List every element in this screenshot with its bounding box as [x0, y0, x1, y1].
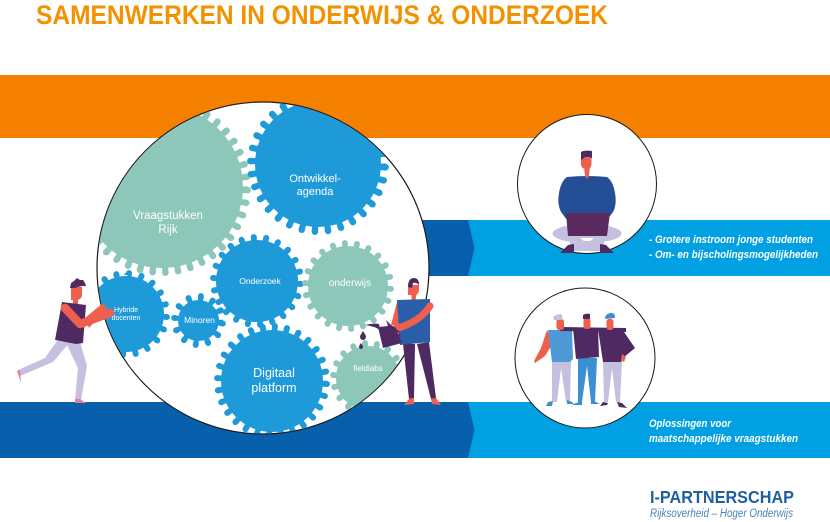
- result circle: collaboration: [515, 288, 655, 428]
- icon: oil can: [359, 320, 402, 349]
- label: Hybride docenten: docenten: [112, 315, 141, 322]
- label: onderwijs: onderwijs: [329, 278, 371, 289]
- gears group: [98, 104, 400, 434]
- result circle: students: [518, 114, 656, 254]
- label: Digitaal platform: Digitaal: [253, 366, 295, 380]
- label: Digitaal platform: platform: [251, 381, 297, 395]
- logo text: I-PARTNERSCHAP: [650, 487, 794, 507]
- logo text: Rijksoverheid – Hoger Onderwijs: [650, 508, 793, 520]
- label: Ontwikkel-agenda: agenda: [297, 186, 334, 198]
- label: Minoren: Minoren: [184, 315, 215, 325]
- main gear circle: [97, 102, 429, 434]
- gear: Digitaal platform: [217, 326, 327, 436]
- text: upper result: [649, 234, 818, 261]
- gear: Ontwikkelagenda: [250, 96, 386, 232]
- gear: fieldlabs: [333, 343, 403, 413]
- label: Onderzoek: Onderzoek: [239, 276, 282, 286]
- text: upper result: - Grotere instroom jonge studenten: [649, 234, 813, 246]
- figure: man pushing circle: [17, 278, 110, 403]
- gear: Minoren: [174, 296, 223, 345]
- lower result band: [0, 402, 830, 458]
- label: Ontwikkel-agenda: Ontwikkel-: [289, 173, 341, 185]
- gear: onderwijs: [305, 243, 391, 329]
- label: fieldlabs: fieldlabs: [353, 364, 383, 373]
- figure: three people: [534, 313, 635, 408]
- gear: Vraagstukken Rijk: [99, 112, 251, 276]
- figure: person with laptop: [552, 151, 622, 253]
- title: SAMENWERKEN IN ONDERWIJS & ONDERZOEK: [36, 0, 608, 30]
- text: lower result: Oplossingen voor: [649, 418, 732, 430]
- logo text: [650, 487, 794, 520]
- figure: man with oil can: [359, 278, 441, 405]
- label: Hybride docenten: Hybride: [114, 307, 138, 314]
- gear: Onderzoek: [213, 237, 301, 325]
- label: Vraagstukken Rijk: Vraagstukken: [133, 210, 203, 222]
- orange band: [0, 75, 830, 138]
- label: Vraagstukken Rijk: Rijk: [158, 224, 178, 236]
- text: lower result: [649, 418, 798, 445]
- text: lower result: maatschappelijke vraagstukken: [649, 433, 798, 445]
- gear labels: [112, 173, 383, 395]
- upper result band: [420, 220, 830, 276]
- gear: Hybride docenten: [85, 273, 167, 355]
